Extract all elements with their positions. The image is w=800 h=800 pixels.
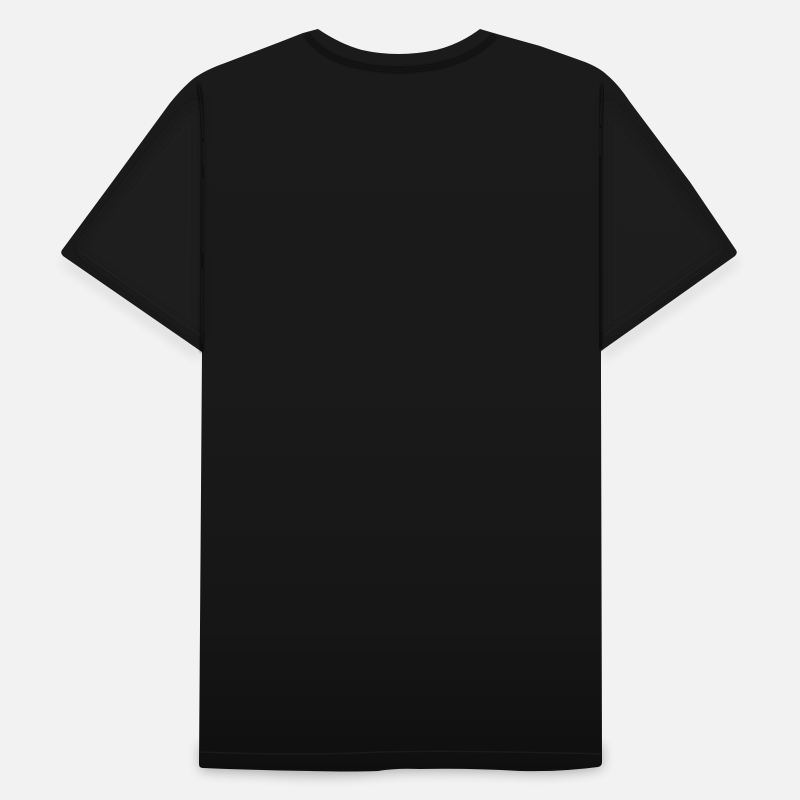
left armhole seam <box>198 84 203 352</box>
bottom hem stitch <box>200 751 602 754</box>
hem and sleeve drop shadows <box>62 258 738 775</box>
right sleeve highlight <box>606 100 720 335</box>
collar ribbing shadow <box>307 35 494 70</box>
right sleeve hem stitch <box>603 250 722 336</box>
right armhole seam <box>600 84 603 350</box>
t-shirt silhouette <box>61 29 737 772</box>
left sleeve hem stitch <box>78 250 201 336</box>
left sleeve highlight <box>80 100 198 335</box>
